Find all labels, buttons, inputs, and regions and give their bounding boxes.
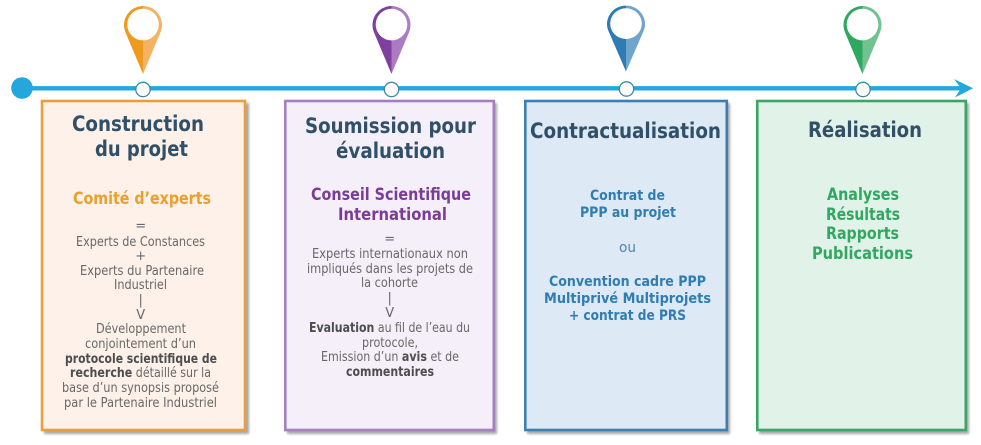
timeline arrow xyxy=(11,77,973,99)
body text: Evaluation au fil de l’eau du xyxy=(309,321,470,336)
timeline node 1 xyxy=(136,82,150,97)
contract text: Contrat de xyxy=(590,187,665,204)
outputs list: Publications xyxy=(812,244,913,264)
body text: V xyxy=(136,308,145,323)
body text: Experts internationaux non xyxy=(312,247,468,262)
body text: protocole, xyxy=(362,336,418,351)
contract text: Convention cadre PPP xyxy=(549,273,706,290)
body text: protocole scientifique de xyxy=(65,352,217,367)
panel: soumission pour évaluation xyxy=(285,101,497,434)
body text: | xyxy=(388,291,392,306)
body text: la cohorte xyxy=(361,276,418,291)
body text: base d’un synopsis proposé xyxy=(62,381,219,396)
timeline node 4 xyxy=(856,82,870,97)
subheading: conseil scientifique international xyxy=(311,185,471,225)
heading: évaluation xyxy=(336,139,445,164)
contract text xyxy=(544,187,711,324)
outputs list: Résultats xyxy=(826,205,900,225)
heading: Soumission pour xyxy=(305,114,476,139)
body text xyxy=(62,219,219,411)
body text: conjointement d’un xyxy=(85,337,196,352)
body text: Industriel xyxy=(114,278,167,293)
body text: Experts de Constances xyxy=(76,235,205,250)
contract text: ou xyxy=(619,239,636,256)
panel: réalisation xyxy=(757,101,969,434)
outputs list: Analyses xyxy=(827,185,899,205)
body text: = xyxy=(384,232,395,247)
outputs list: Rapports xyxy=(826,224,899,244)
body text: par le Partenaire Industriel xyxy=(64,396,217,411)
body text: recherche détaillé sur la xyxy=(70,366,211,381)
heading: Contractualisation xyxy=(530,119,721,144)
body text: Emission d’un avis et de xyxy=(321,350,459,365)
pin: green xyxy=(843,6,882,74)
body text: commentaires xyxy=(346,365,434,380)
subheading: comité d'experts: Comité d’experts xyxy=(73,189,211,209)
panel: contractualisation xyxy=(525,101,730,434)
heading xyxy=(305,114,476,164)
contract text: PPP au projet xyxy=(580,204,676,221)
pin: orange xyxy=(124,6,162,74)
body text: impliqués dans les projets de xyxy=(307,262,473,277)
contract text: + contrat de PRS xyxy=(569,307,686,324)
body text: = xyxy=(135,219,146,234)
timeline node 2 xyxy=(384,82,399,97)
heading xyxy=(72,112,204,162)
heading: du projet xyxy=(95,137,188,162)
pin: purple xyxy=(372,6,411,74)
subheading: conseil scientifique international: International xyxy=(338,205,447,225)
body text: V xyxy=(385,306,394,321)
body text: Experts du Partenaire xyxy=(80,264,204,279)
body text: | xyxy=(139,293,143,308)
heading: Construction xyxy=(72,112,204,137)
outputs list xyxy=(812,185,913,264)
subheading: conseil scientifique international: Conseil Scientifique xyxy=(311,185,471,205)
body text: Développement xyxy=(96,322,186,337)
panel: construction du projet xyxy=(42,101,249,434)
body text xyxy=(307,232,473,380)
heading: Réalisation xyxy=(808,118,922,143)
body text: + xyxy=(135,249,146,264)
timeline node 3 xyxy=(619,82,634,96)
contract text: Multiprivé Multiprojets xyxy=(544,290,711,307)
pin: blue xyxy=(607,6,645,72)
